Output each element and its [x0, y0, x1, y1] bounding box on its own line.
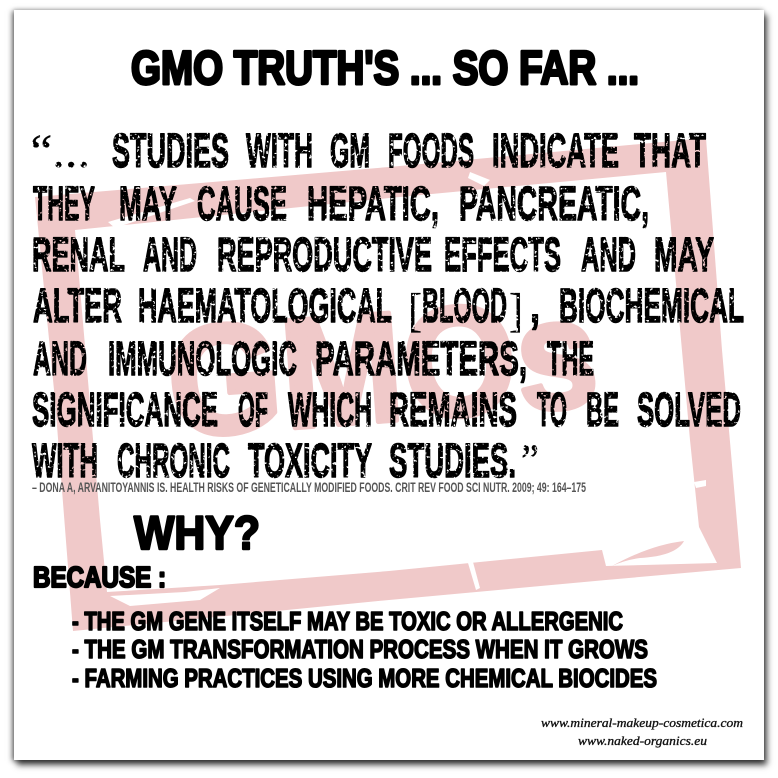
- quote block: [30, 125, 744, 488]
- quote line 4: HAEMATOLOGICAL: [138, 280, 392, 333]
- quote line 6: REMAINS: [389, 384, 517, 437]
- quote line 3: AND: [143, 229, 197, 282]
- quote line 6: SIGNIFICANCE: [32, 384, 218, 437]
- quote line 1: GM: [330, 125, 370, 178]
- quote line 3: REPRODUCTIVE: [217, 229, 432, 282]
- quote line 6: BE: [586, 384, 619, 437]
- quote line 7: CHRONIC: [117, 435, 230, 488]
- reason 1: - THE GM GENE ITSELF MAY BE TOXIC OR ALLERGENIC: [72, 606, 623, 636]
- quote line 2: PANCREATIC,: [459, 178, 649, 231]
- quote line 4: [33, 280, 744, 337]
- subheading: because: BECAUSE :: [33, 562, 166, 594]
- quote line 4: [: [408, 284, 422, 337]
- quote line 1: “...: [30, 125, 90, 178]
- background stamp: GMOs: [35, 138, 741, 631]
- stamp frame: [35, 138, 741, 631]
- quote line 6: OF: [238, 384, 268, 437]
- quote line 2: HEPATIC,: [307, 178, 439, 231]
- quote line 7: STUDIES.: [389, 435, 516, 488]
- stamp swoosh: [612, 541, 684, 566]
- quote line 1: [30, 125, 706, 178]
- heading: why: WHY?: [134, 506, 260, 559]
- quote line 7: ”: [521, 435, 539, 488]
- quote line 2: THEY: [33, 178, 95, 231]
- quote line 5: [33, 333, 594, 386]
- quote block: THE: [547, 333, 594, 386]
- quote line 5: AND: [33, 333, 87, 386]
- quote line 5: IMMUNOLOGIC: [108, 333, 297, 386]
- link 2: www.naked-organics.eu: [578, 733, 708, 748]
- quote line 7: [32, 435, 539, 488]
- quote line 3: [32, 229, 714, 282]
- website links: [541, 715, 743, 748]
- quote line 4: ALTER: [33, 280, 122, 333]
- link 1: www.mineral-makeup-cosmetica.com: [541, 715, 743, 730]
- quote line 3: RENAL: [32, 229, 125, 282]
- stamp scratches: [108, 172, 706, 606]
- quote line 5: PARAMETERS,: [315, 333, 527, 386]
- quote line 1: STUDIES: [112, 125, 229, 178]
- reasons list: [72, 606, 657, 693]
- quote line 2: MAY: [119, 178, 177, 231]
- quote line 4: BLOOD: [422, 280, 507, 333]
- quote line 6: WHICH: [288, 384, 372, 437]
- quote line 2: [33, 178, 649, 231]
- quote line 3: EFFECTS: [444, 229, 561, 282]
- quote line 1: THAT: [634, 125, 706, 178]
- title: GMO TRUTH'S ... SO FAR ...: [131, 41, 639, 94]
- quote line 1: INDICATE: [492, 125, 619, 178]
- quote line 4: ]: [509, 284, 523, 337]
- quote line 7: TOXICITY: [248, 435, 372, 488]
- quote line 4: ,: [530, 280, 540, 333]
- quote line 1: FOODS: [388, 125, 474, 178]
- quote line 1: WITH: [246, 125, 313, 178]
- stamp word: GMOs: [162, 265, 603, 471]
- quote line 2: CAUSE: [197, 178, 287, 231]
- quote line 3: MAY: [654, 229, 714, 282]
- quote line 3: AND: [581, 229, 636, 282]
- quote line 6: [32, 384, 741, 437]
- quote line 7: WITH: [32, 435, 98, 488]
- quote line 6: TO: [537, 384, 567, 437]
